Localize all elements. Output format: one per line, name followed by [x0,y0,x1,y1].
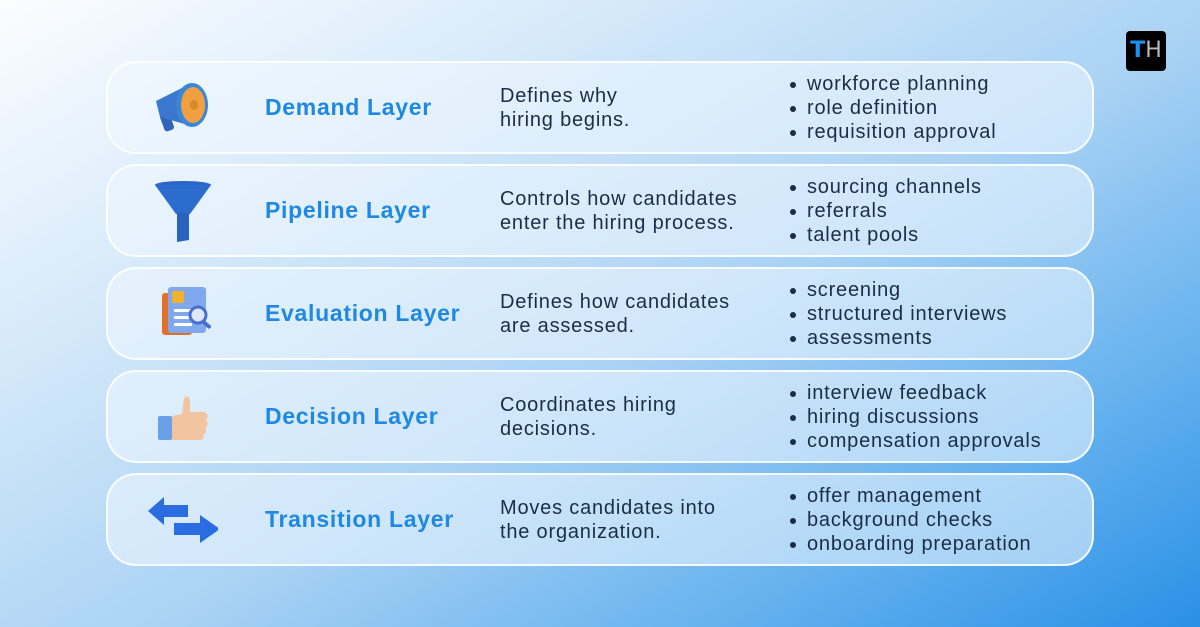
description: decisions. [500,418,597,440]
bullet list [790,72,996,142]
bullet list: compensation approvals [807,430,1041,452]
icon: thumbs up [158,396,208,440]
description: Defines why [500,84,618,106]
description [500,84,630,130]
bullet list: background checks [807,508,993,530]
title: Transition Layer [265,506,454,532]
bullet list: assessments [807,326,933,348]
bullet list: workforce planning [807,72,989,94]
bullet list: screening [807,278,901,300]
title: Pipeline Layer [265,197,431,223]
title: Decision Layer [265,403,438,429]
logo: TH [1130,38,1162,63]
description: enter the hiring process. [500,212,735,234]
icon: megaphone [156,83,208,132]
bullet list: offer management [807,484,982,506]
card: evaluation [106,267,1094,360]
description [500,394,677,440]
card: pipeline [106,164,1094,257]
description [500,188,737,234]
bullet list [790,484,1031,554]
bullet list [790,382,1041,452]
bullet list [790,176,982,246]
title: Evaluation Layer [265,300,460,326]
description: Defines how candidates [500,290,730,312]
bullet list: sourcing channels [807,176,982,198]
bullet list: structured interviews [807,302,1007,324]
bullet list: hiring discussions [807,406,979,428]
bullet list: interview feedback [807,382,987,404]
icon: document with magnifier [162,287,211,335]
description [500,290,730,336]
logo [1126,31,1166,71]
description [500,496,716,542]
icon: arrows [148,497,218,543]
bullet list: onboarding preparation [807,532,1031,554]
bullet list [790,278,1007,348]
description: Controls how candidates [500,188,737,210]
description: hiring begins. [500,108,630,130]
bullet list: talent pools [807,224,919,246]
description: are assessed. [500,314,635,336]
card: transition [106,473,1094,566]
bullet list: referrals [807,200,888,222]
icon: funnel [155,181,211,242]
card: decision [106,370,1094,463]
bullet list: role definition [807,96,938,118]
description: the organization. [500,520,661,542]
card: demand [106,61,1094,154]
bullet list: requisition approval [807,120,996,142]
description: Coordinates hiring [500,394,677,416]
description: Moves candidates into [500,496,716,518]
title: Demand Layer [265,94,432,120]
